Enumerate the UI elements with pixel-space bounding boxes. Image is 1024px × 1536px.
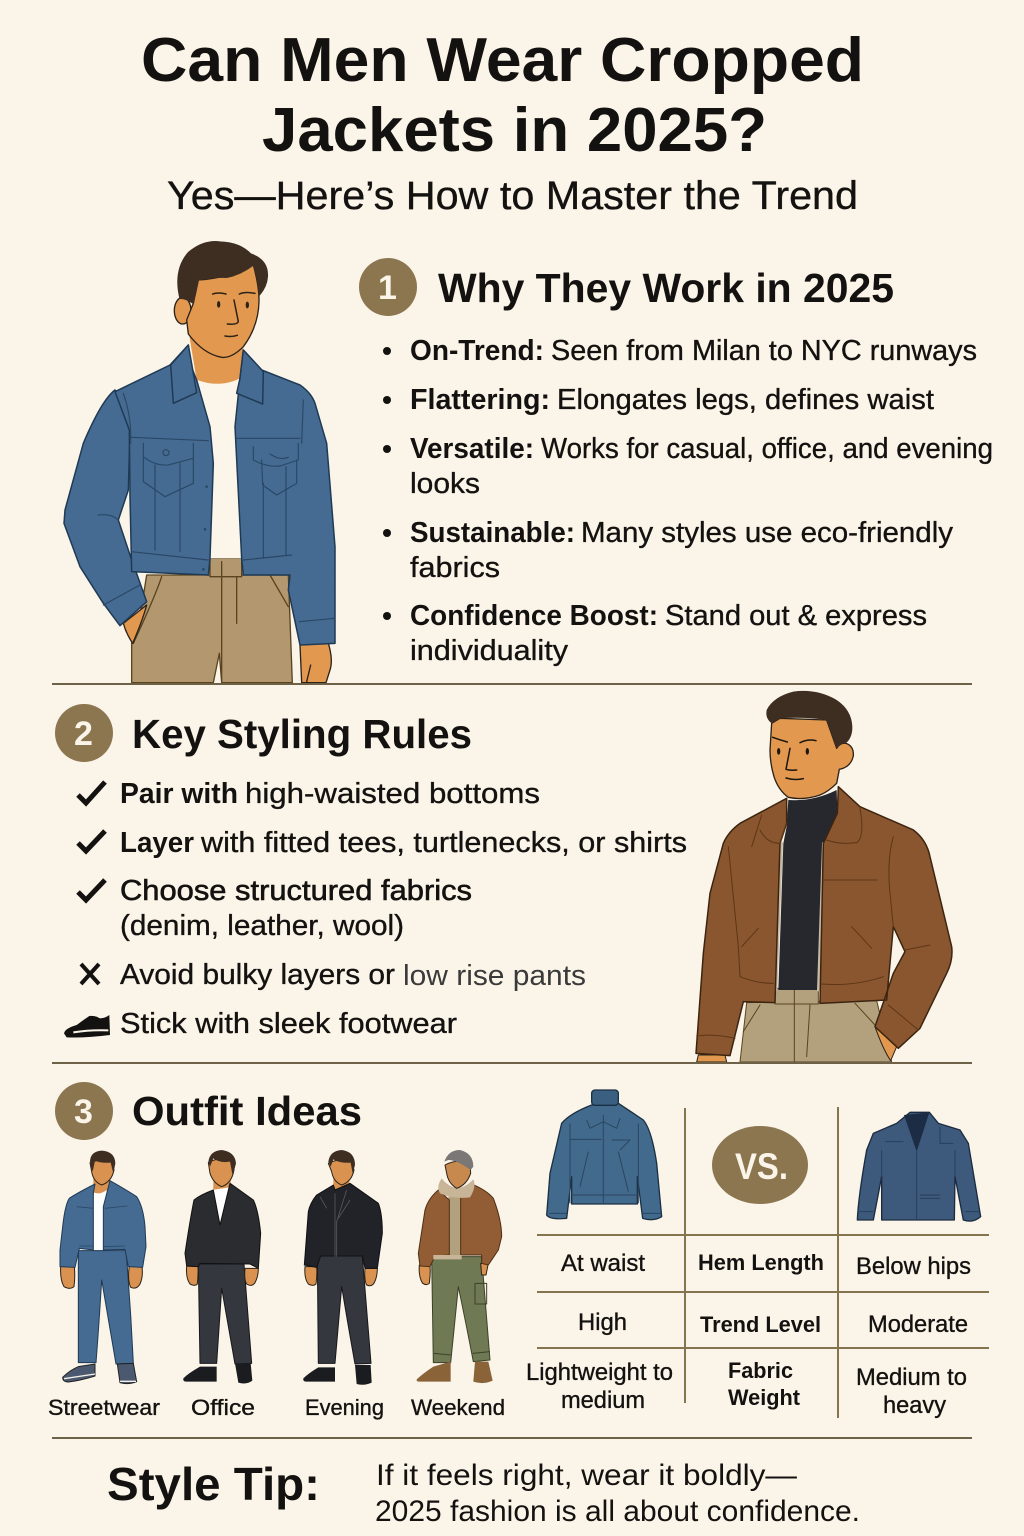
heading: why they work in 2025: Why They Work in 2025 bbox=[438, 265, 894, 311]
bullet: sustainable: Sustainable: bbox=[410, 517, 575, 549]
badge 2 bbox=[55, 704, 113, 762]
outfit: streetwear bbox=[48, 1151, 160, 1420]
row: hem length: At waist bbox=[561, 1250, 645, 1277]
illustration: man in cropped denim jacket bbox=[64, 242, 335, 683]
bullet: versatile: looks bbox=[410, 468, 480, 500]
title: Jackets in 2025? bbox=[262, 96, 767, 165]
table grid bbox=[537, 1107, 989, 1418]
bullet: sustainable: Many styles use eco-friendly bbox=[581, 517, 954, 549]
rule: structured fabrics: Choose structured fabrics bbox=[120, 875, 472, 907]
row: fabric weight: Fabric bbox=[728, 1358, 793, 1383]
bullet: versatile: Works for casual, office, and evening bbox=[541, 433, 993, 465]
section 3: outfit ideas bbox=[48, 1082, 505, 1420]
bullet: versatile bbox=[383, 433, 993, 500]
rule: sleek footwear: Stick with sleek footwear bbox=[120, 1008, 457, 1040]
style tip text bbox=[375, 1459, 860, 1528]
section 2: key styling rules bbox=[55, 704, 687, 1040]
bullet: flattering: Elongates legs, defines waist bbox=[557, 384, 934, 416]
bullet: confidence boost: individuality bbox=[410, 635, 569, 667]
rule: fitted layers: Layer bbox=[120, 827, 194, 859]
badge 2: 2 bbox=[74, 715, 93, 753]
style tip text: 2025 fashion is all about confidence. bbox=[375, 1495, 860, 1528]
bullet: on-trend: Seen from Milan to NYC runways bbox=[551, 335, 977, 367]
badge 1: 1 bbox=[378, 269, 397, 307]
badge: vs: VS. bbox=[735, 1146, 788, 1187]
rule: high-waisted bottoms: high-waisted bottoms bbox=[245, 778, 540, 810]
section divider bbox=[52, 683, 972, 685]
section divider bbox=[52, 1437, 972, 1439]
comparison table: cropped vs long jacket bbox=[526, 1090, 989, 1419]
rule: avoid bulky layers: Avoid bulky layers or bbox=[120, 959, 395, 991]
section 1: why they work bbox=[359, 258, 993, 667]
figure: weekend bbox=[417, 1150, 502, 1383]
row: fabric weight: Lightweight to bbox=[526, 1359, 673, 1386]
heading: key styling rules: Key Styling Rules bbox=[132, 711, 472, 757]
row: fabric weight: Weight bbox=[728, 1385, 801, 1410]
icon: long jacket bbox=[857, 1112, 981, 1221]
rule: structured fabrics: (denim, leather, wool) bbox=[120, 910, 404, 942]
row: trend level: Trend Level bbox=[700, 1312, 821, 1337]
label: office: Office bbox=[191, 1395, 255, 1420]
badge 3 bbox=[55, 1082, 113, 1140]
icon: cropped jacket bbox=[547, 1090, 662, 1220]
rule: avoid bulky layers: low rise pants bbox=[403, 960, 586, 992]
row: trend level bbox=[578, 1309, 968, 1338]
section divider bbox=[52, 1062, 972, 1064]
bullet: confidence boost bbox=[383, 600, 927, 667]
illustration: man in cropped brown jacket bbox=[696, 691, 952, 1062]
outfit: evening bbox=[303, 1150, 384, 1420]
rule: high-waisted bottoms: Pair with bbox=[120, 778, 238, 810]
row: fabric weight: heavy bbox=[883, 1392, 946, 1419]
style tip bbox=[107, 1458, 860, 1528]
badge 3: 3 bbox=[74, 1093, 93, 1131]
bullet: flattering bbox=[383, 384, 934, 416]
label: weekend: Weekend bbox=[411, 1395, 505, 1420]
bullet: versatile: Versatile: bbox=[410, 433, 534, 465]
bullet: confidence boost: Stand out & express bbox=[665, 600, 927, 632]
outfit: weekend bbox=[411, 1150, 505, 1420]
bullet: confidence boost: Confidence Boost: bbox=[410, 600, 658, 632]
bullet: sustainable: fabrics bbox=[410, 552, 500, 584]
row: fabric weight: medium bbox=[561, 1387, 645, 1414]
title: Can Men Wear Cropped bbox=[141, 26, 864, 95]
label: evening: Evening bbox=[305, 1395, 384, 1420]
badge 1 bbox=[359, 258, 417, 316]
row: hem length: Hem Length bbox=[698, 1250, 824, 1275]
row: hem length: Below hips bbox=[856, 1253, 971, 1280]
bullet: flattering: Flattering: bbox=[410, 384, 550, 416]
row: fabric weight bbox=[526, 1358, 967, 1419]
figure: office bbox=[183, 1150, 261, 1383]
figure: evening bbox=[303, 1150, 382, 1385]
heading: outfit ideas: Outfit Ideas bbox=[132, 1088, 362, 1134]
style tip text: If it feels right, wear it boldly— bbox=[376, 1459, 797, 1492]
bullet: sustainable bbox=[383, 517, 954, 584]
bullet: on-trend: On-Trend: bbox=[410, 335, 544, 367]
row: trend level: High bbox=[578, 1309, 627, 1336]
rule: high-waisted bottoms bbox=[78, 778, 540, 810]
style tip label: Style Tip: bbox=[107, 1458, 320, 1510]
row: hem length bbox=[561, 1250, 971, 1280]
rule: structured fabrics bbox=[78, 875, 472, 942]
icon: shoe bbox=[64, 1015, 110, 1038]
badge: vs bbox=[712, 1126, 808, 1204]
subtitle: Yes—Here’s How to Master the Trend bbox=[167, 174, 858, 218]
row: trend level: Moderate bbox=[868, 1311, 968, 1338]
rule: fitted layers: with fitted tees, turtlenecks, or shirts bbox=[200, 827, 687, 859]
figure: streetwear bbox=[60, 1151, 146, 1384]
row: fabric weight: Medium to bbox=[856, 1364, 967, 1391]
rule: avoid bulky layers bbox=[81, 959, 586, 992]
label: streetwear: Streetwear bbox=[48, 1395, 160, 1420]
outfit: office bbox=[183, 1150, 261, 1420]
title bbox=[141, 26, 864, 165]
